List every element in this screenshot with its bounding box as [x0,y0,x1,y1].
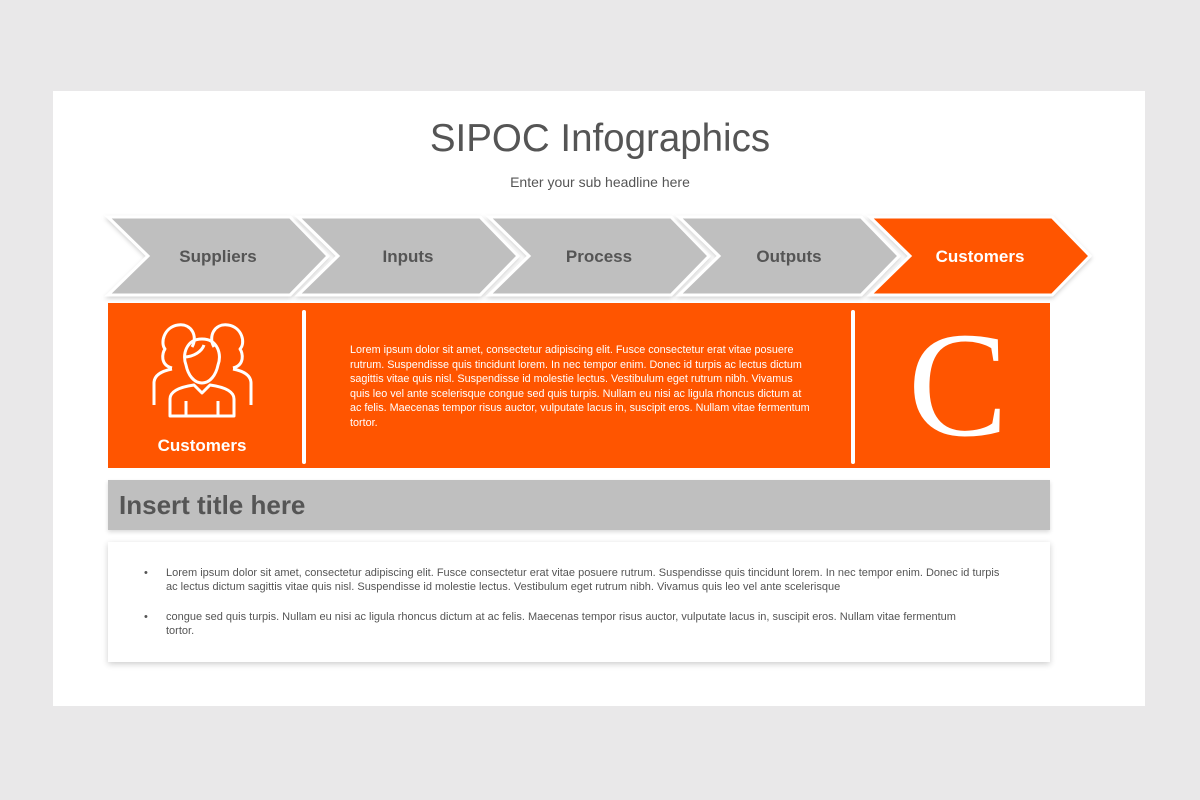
letter C: C [908,302,1008,468]
bullet 2: congue sed quis turpis. Nullam eu nisi ac ligula rhoncus dictum at ac felis. Maecenas tempor risus auctor, vulputate lacus in, suscipit eros. Nullam vitae fermentum tortor. [166,611,956,637]
panel: orange detail [108,303,1050,468]
chevron: Outputs: Outputs [756,247,822,266]
divider line right [851,310,855,464]
text block: Lorem ipsum dolor sit amet, consectetur adipiscing elit. Fusce consectetur erat vitae posuere rutrum. Suspendisse quis tincidunt lorem. In nec tempor enim. Donec id turpis ac lectus dictum sagittis vitae quis nisl. Suspendisse id molestie lectus. Vestibulum eget rutrum nibh. Vivamus quis leo vel ante scelerisque congue sed quis turpis. Nullam eu nisi ac ligula rhoncus dictum at ac felis. Maecenas tempor risus auctor, vulputate lacus in, suscipit eros. Nullam vitae fermentum tortor. [350,344,810,428]
chevron: Process: Process [566,247,632,266]
chevron: Process [489,217,709,295]
chevron: Inputs [298,217,518,295]
bullet 1: • [144,567,148,579]
title: SIPOC Infographics [430,117,770,160]
chevron: Inputs: Inputs [382,247,434,266]
bullet 1: Lorem ipsum dolor sit amet, consectetur adipiscing elit. Fusce consectetur erat vitae posuere rutrum. Suspendisse quis tincidunt lorem. In nec tempor enim. Donec id turpis ac lectus dictum sagittis vitae quis nisl. Suspendisse id molestie lectus. Vestibulum eget rutrum nibh. Vivamus quis leo vel ante scelerisque [166,567,999,593]
chevron: Customers: Customers [936,247,1024,266]
label: Customers: Customers [158,436,246,455]
title bar [108,480,1050,530]
chevron: Suppliers [108,217,328,295]
bullet list box [108,542,1050,662]
chevron: Customers [870,217,1090,295]
bullet 2: • [144,611,148,623]
card [53,91,1145,706]
subtitle: Enter your sub headline here [510,174,690,190]
divider line left [302,310,306,464]
title bar: Insert title here [119,490,305,520]
chevron: Outputs [679,217,899,295]
icon: customers group [152,323,252,418]
chevron: Suppliers: Suppliers [179,247,257,266]
